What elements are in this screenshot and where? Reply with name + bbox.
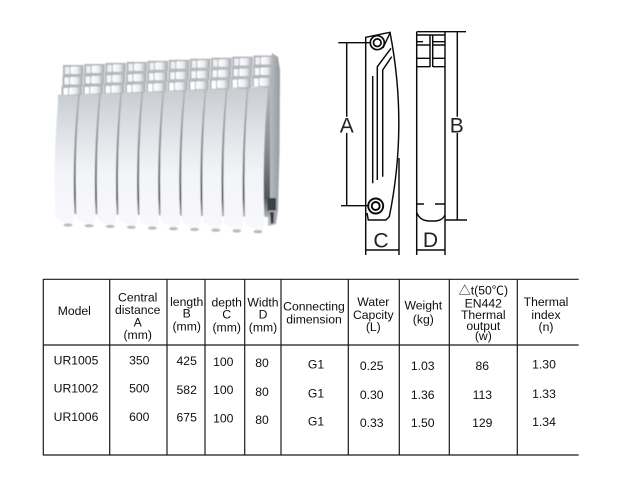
row: UR1006 <box>54 410 556 430</box>
table header: dimension <box>286 312 342 326</box>
table header: depth <box>211 296 242 310</box>
specification table <box>43 279 579 456</box>
row: UR1002: 500 <box>129 382 150 396</box>
radiator end connector <box>268 198 276 224</box>
row: UR1005: 1.30 <box>532 358 556 372</box>
table header: (mm) <box>172 320 201 334</box>
table header: Thermal <box>461 308 506 322</box>
table header: Thermal <box>524 295 568 309</box>
dimension A lines <box>338 43 370 206</box>
table header: △t(50℃) <box>459 283 508 297</box>
table header: Width <box>247 296 279 310</box>
dimension C lines <box>366 158 399 255</box>
front view drawing with dimensions B and D <box>417 32 467 255</box>
inner ribs <box>373 33 392 183</box>
row: UR1006: 675 <box>177 411 197 425</box>
row: UR1005: 350 <box>129 353 150 367</box>
table header: (mm) <box>123 328 152 342</box>
table header: (n) <box>539 320 553 334</box>
row: UR1006: 1.34 <box>532 415 556 429</box>
top pipe ring <box>370 36 384 50</box>
table header: (w) <box>475 329 492 343</box>
table header: (L) <box>366 320 381 334</box>
radiator front sections <box>55 88 268 233</box>
front outline <box>417 32 445 255</box>
table header: output <box>466 319 501 333</box>
table grid <box>43 279 579 456</box>
table header: A <box>134 316 143 330</box>
table header <box>58 283 568 343</box>
table header: C <box>222 307 231 321</box>
row: UR1005: 1.03 <box>411 359 435 373</box>
row: UR1006: 0.33 <box>360 416 384 430</box>
row: UR1006: 80 <box>255 413 269 427</box>
table header: Water <box>357 295 389 309</box>
row: UR1002: 0.30 <box>360 388 384 402</box>
label B: B <box>450 114 464 138</box>
label A: A <box>340 114 354 138</box>
row: UR1002: 582 <box>177 383 197 397</box>
table header: (mm) <box>212 321 241 335</box>
table header: EN442 <box>465 297 502 311</box>
table header: D <box>259 307 268 321</box>
row: UR1006: 600 <box>129 410 150 424</box>
table header: Weight <box>404 298 443 312</box>
row: UR1006: 129 <box>472 416 493 430</box>
row: UR1002: 1.33 <box>532 387 556 401</box>
radiator rear shading <box>58 87 270 217</box>
row: UR1002: 1.36 <box>411 388 435 402</box>
row: UR1005: 80 <box>255 356 269 370</box>
radiator side panel <box>266 53 280 226</box>
row: UR1005: UR1005 <box>54 353 99 367</box>
table header: length <box>170 295 203 309</box>
row: UR1006: 1.50 <box>411 416 435 430</box>
profile outline <box>366 32 399 255</box>
row: UR1002 <box>54 382 556 402</box>
row: UR1002: 80 <box>255 385 269 399</box>
row: UR1006: 100 <box>213 412 234 426</box>
row: UR1005 <box>54 353 556 373</box>
row: UR1006: G1 <box>308 415 324 429</box>
bottom cap <box>417 204 467 221</box>
table header: distance <box>115 303 161 317</box>
table header: (mm) <box>249 321 277 335</box>
table header: Model <box>58 304 91 318</box>
dimension B lines <box>456 32 458 220</box>
row: UR1005: G1 <box>308 358 324 372</box>
table header: B <box>183 307 191 321</box>
row: UR1005: 100 <box>213 355 234 369</box>
table header: Central <box>118 291 157 305</box>
row: UR1002: G1 <box>308 387 324 401</box>
bottom pipe ring <box>368 198 383 214</box>
table header: Connecting <box>283 300 345 314</box>
row: UR1005: 86 <box>476 359 489 373</box>
table header: index <box>531 308 561 322</box>
table header: Capcity <box>353 308 395 322</box>
row: UR1006: UR1006 <box>54 410 99 424</box>
label D: D <box>423 229 438 252</box>
table header: (kg) <box>413 312 434 326</box>
radiator photo <box>55 53 280 233</box>
radiator fin rows <box>62 56 274 96</box>
row: UR1002: UR1002 <box>54 382 99 396</box>
row: UR1002: 113 <box>473 388 492 402</box>
top fin boxes <box>417 32 466 67</box>
row: UR1002: 100 <box>213 383 234 397</box>
dimension D lines <box>417 249 445 251</box>
label C: C <box>373 230 389 252</box>
row: UR1005: 0.25 <box>360 359 384 373</box>
row: UR1005: 425 <box>177 354 197 368</box>
side profile drawing with dimensions A and C <box>338 32 399 255</box>
